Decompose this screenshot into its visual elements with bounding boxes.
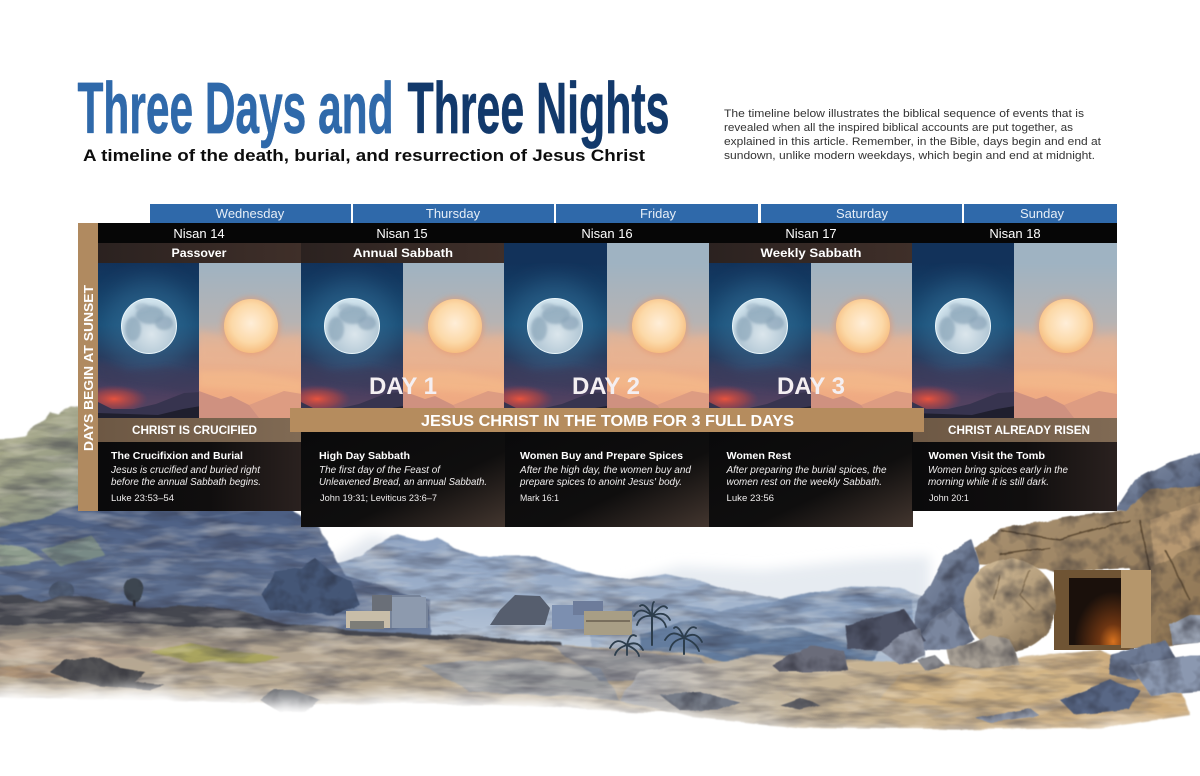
panel: women rest: Luke 23:56 (726, 493, 774, 504)
foreground boulders (660, 606, 1200, 722)
valley ground (0, 622, 800, 712)
weekday header row: Wednesday (216, 206, 285, 221)
panel: high day sabbath: The first day of the Feast of (319, 465, 441, 476)
palm trees (610, 602, 702, 656)
day number labels (369, 373, 845, 400)
round rolling stone (964, 559, 1056, 651)
nisan date row: Nisan 18 (989, 226, 1041, 241)
panel: high day sabbath: John 19:31; Leviticus 23:6–7 (320, 493, 437, 504)
panel: the crucifixion and burial: Jesus is crucified and buried right (110, 465, 261, 476)
dark bush and trees (49, 558, 360, 615)
observance headers: Passover (172, 246, 227, 260)
panel: women visit the tomb: Women Visit the Tomb (928, 450, 1045, 462)
weekday header row: Thursday (426, 206, 481, 221)
description panels background (98, 432, 1117, 527)
nisan date row (98, 223, 1117, 243)
tomb band (290, 408, 924, 432)
nisan date row: Nisan 17 (785, 226, 837, 241)
panel: women visit the tomb: John 20:1 (929, 493, 969, 504)
foreground sandy path (620, 650, 1190, 730)
tomb band: JESUS CHRIST IN THE TOMB FOR 3 FULL DAYS (421, 413, 794, 430)
panel: women buy and prepare spices (519, 450, 691, 504)
panel: the crucifixion and burial (110, 450, 261, 504)
low mist at the foot of the scene (0, 689, 1200, 776)
panel: women visit the tomb: morning while it is still dark. (928, 477, 1049, 488)
intro paragraph: sundown, unlike modern weekdays, which begin and end at midnight. (724, 150, 1095, 162)
panel: women rest: women rest on the weekly Sabbath. (726, 477, 882, 488)
panel: women rest: Women Rest (726, 450, 792, 462)
subtitle: A timeline of the death, burial, and resurrection of Jesus Christ (83, 146, 645, 165)
intro paragraph: explained in this article. Remember, in the Bible, days begin and end at (724, 136, 1102, 148)
panel: the crucifixion and burial: Luke 23:53–54 (111, 493, 174, 504)
status bands (98, 418, 1117, 442)
panel: women rest: After preparing the burial spices, the (726, 465, 887, 476)
panel: women visit the tomb: Women bring spices early in the (928, 465, 1068, 476)
village buildings (346, 595, 632, 635)
doorway (1054, 570, 1151, 650)
timeline chart (78, 204, 1117, 527)
dark mounds on ground (50, 658, 320, 712)
observance headers: Weekly Sabbath (760, 246, 862, 260)
panel: high day sabbath (319, 450, 487, 504)
status bands: CHRIST ALREADY RISEN (948, 425, 1090, 437)
intro paragraph (724, 108, 1102, 162)
panel: women buy and prepare spices: prepare spices to anoint Jesus' body. (519, 477, 682, 488)
left green hillside (0, 407, 130, 545)
panel: the crucifixion and burial: before the annual Sabbath begins. (111, 477, 261, 488)
pale distant haze peaks (330, 535, 930, 610)
day number labels: DAY 3 (777, 373, 845, 400)
panel: women buy and prepare spices: After the high day, the women buy and (519, 465, 691, 476)
nisan date row: Nisan 15 (376, 226, 428, 241)
vertical label: days begin at sunset: DAYS BEGIN AT SUNSET (81, 285, 96, 451)
far blue mountains (330, 534, 925, 675)
panel: high day sabbath: High Day Sabbath (319, 450, 410, 462)
observance headers: Annual Sabbath (353, 246, 453, 260)
intro paragraph: The timeline below illustrates the biblical sequence of events that is (724, 108, 1084, 120)
upper rocks (912, 450, 1200, 650)
status bands: CHRIST IS CRUCIFIED (132, 425, 257, 437)
weekday header row: Saturday (836, 206, 889, 221)
background landscape illustration (0, 407, 1200, 776)
observance headers (98, 243, 912, 263)
nisan date row: Nisan 16 (581, 226, 633, 241)
dark horizon hedges (0, 594, 560, 652)
panel: women buy and prepare spices: Mark 16:1 (520, 493, 559, 504)
intro paragraph: revealed when all the inspired biblical accounts are put together, as (724, 122, 1073, 134)
panel: the crucifixion and burial: The Crucifixion and Burial (111, 450, 243, 462)
panel: women buy and prepare spices: Women Buy and Prepare Spices (520, 450, 683, 462)
title: Three Days and (78, 69, 394, 149)
weekday header row: Friday (640, 206, 677, 221)
day and night sky panels (80, 243, 1117, 418)
panel: women rest (726, 450, 887, 504)
weekday header row (150, 204, 1117, 223)
nisan date row: Nisan 14 (173, 226, 225, 241)
weekday header row: Sunday (1020, 206, 1065, 221)
day number labels: DAY 2 (572, 373, 640, 400)
title: Three Nights (408, 69, 670, 149)
panel: high day sabbath: Unleavened Bread, an annual Sabbath. (319, 477, 487, 488)
big blue mountain (0, 505, 430, 640)
tomb rock face and doorway (660, 450, 1200, 722)
vertical label: days begin at sunset (78, 223, 98, 511)
day number labels: DAY 1 (369, 373, 437, 400)
panel: women visit the tomb (928, 450, 1068, 504)
